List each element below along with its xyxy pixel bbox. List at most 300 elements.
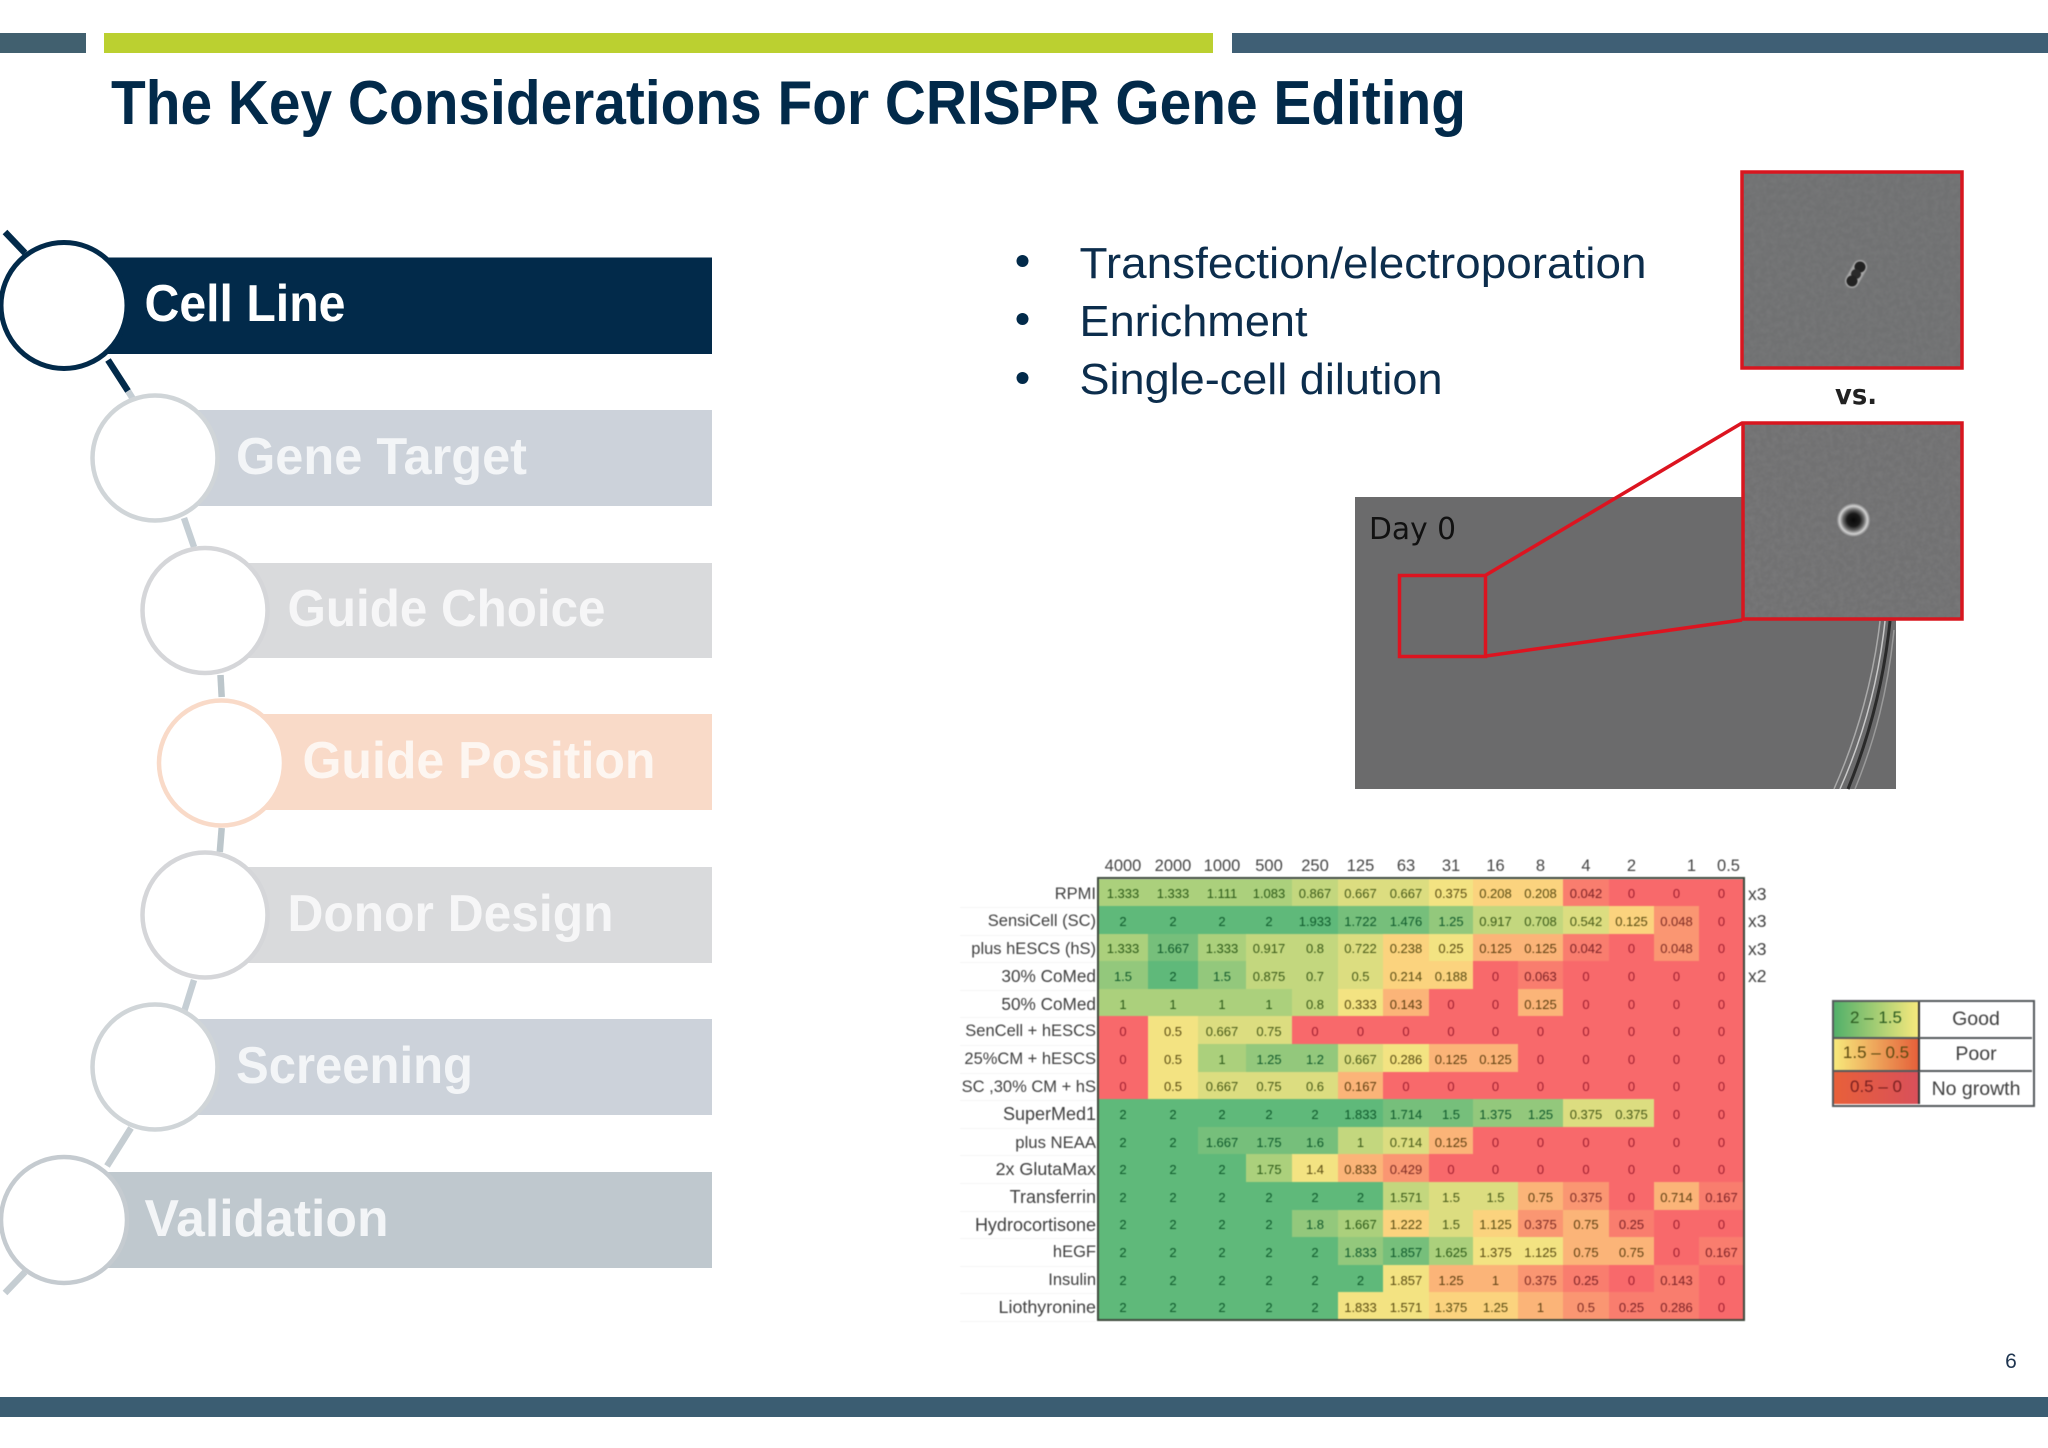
row: Liothyronine: 0 (1718, 1300, 1725, 1315)
row: Hydrocortisone: 2 (1265, 1217, 1273, 1232)
row: SensiCell: 2 (1218, 914, 1226, 929)
row: 25%CM + hESCS: 0.125 (1479, 1052, 1512, 1067)
row: Hydrocortisone: 2 (1119, 1217, 1127, 1232)
row: SuperMed1: 2 (1218, 1107, 1226, 1122)
row: Liothyronine: 1 (1537, 1300, 1544, 1315)
row: Liothyronine: 0.25 (1619, 1300, 1644, 1315)
row: 2x GlutaMax: 2 (1169, 1162, 1177, 1177)
row: SuperMed1: 1.5 (1442, 1107, 1460, 1122)
legend swatch: 2-1.5 (1834, 1002, 1918, 1037)
row: hEGF: 1.857 (1390, 1245, 1422, 1260)
replicate labels: x2 (1748, 966, 1766, 986)
row: 2x GlutaMax: 0 (1492, 1162, 1499, 1177)
row: 50% CoMed: 0.333 (1344, 997, 1377, 1012)
row: 25%CM + hESCS: 0 (1582, 1052, 1590, 1067)
row: 2x GlutaMax: 0 (1673, 1162, 1680, 1177)
row: SC ,30% CM + hS: 0 (1492, 1079, 1499, 1094)
row: RPMI: 0.867 (1299, 886, 1331, 901)
heatmap column headers: 8 (1536, 857, 1545, 875)
row: Hydrocortisone: 0 (1673, 1217, 1680, 1232)
heatmap row labels: 25%CM + hESCS (964, 1050, 1096, 1068)
row: RPMI: 0.667 (1344, 886, 1377, 901)
row: hEGF: 0.75 (1573, 1245, 1599, 1260)
step: Validation (1, 1157, 712, 1283)
row: hEGF: 2 (1119, 1245, 1127, 1260)
replicate labels: x3 (1748, 911, 1766, 931)
bullet list (1016, 239, 1646, 404)
row: plus NEAA: 2 (1119, 1135, 1127, 1150)
row: plus hESCS: 0.8 (1306, 941, 1324, 956)
row: Liothyronine: 1.375 (1435, 1300, 1467, 1315)
row: Insulin: 2 (1169, 1273, 1177, 1288)
row: SC ,30% CM + hS: 0 (1628, 1079, 1635, 1094)
step: Cell Line (1, 242, 712, 368)
row: 30% CoMed: 2 (1169, 969, 1177, 984)
row: 25%CM + hESCS: 1.2 (1306, 1052, 1324, 1067)
row: plus NEAA: 0 (1537, 1135, 1544, 1150)
title: The Key Considerations For CRISPR Gene Editing (111, 69, 1466, 138)
row: SenCell + hESCS: 0 (1119, 1024, 1127, 1039)
replicate labels (1748, 884, 1766, 986)
row: 50% CoMed: 1 (1218, 997, 1226, 1012)
row: 2x GlutaMax: 1.4 (1306, 1162, 1324, 1177)
panel: workflow steps (0, 230, 712, 1296)
row: Transferrin: 1.5 (1486, 1190, 1505, 1205)
row: SC ,30% CM + hS: 0.667 (1206, 1079, 1238, 1094)
row: 2x GlutaMax: 0 (1628, 1162, 1635, 1177)
row: plus hESCS: 0.125 (1524, 941, 1557, 956)
row: plus hESCS: 0.722 (1344, 941, 1377, 956)
row: plus NEAA: 0 (1628, 1135, 1635, 1150)
row: Liothyronine (1098, 1291, 1744, 1320)
row: 30% CoMed: 1.5 (1213, 969, 1231, 984)
row: hEGF: 2 (1311, 1245, 1319, 1260)
row: Liothyronine: 1.25 (1483, 1300, 1508, 1315)
step: Guide Choice: Guide Choice (288, 580, 606, 638)
row: 25%CM + hESCS: 1 (1218, 1052, 1226, 1067)
row: 25%CM + hESCS (1098, 1043, 1744, 1073)
row: 50% CoMed (1098, 988, 1744, 1017)
row: 50% CoMed: 0.125 (1524, 997, 1557, 1012)
inset: single cell (1743, 423, 1962, 619)
row: 50% CoMed: 0 (1582, 997, 1590, 1012)
row: 30% CoMed: 0 (1718, 969, 1725, 984)
row: 50% CoMed: 0 (1718, 997, 1725, 1012)
row: plus NEAA: 0.125 (1435, 1135, 1467, 1150)
small zoom box (1400, 576, 1486, 656)
heatmap column headers: 2 (1627, 857, 1636, 875)
row: 2x GlutaMax (1098, 1153, 1744, 1183)
row: Insulin: 2 (1218, 1273, 1226, 1288)
row: 25%CM + hESCS: 0 (1537, 1052, 1544, 1067)
row: 50% CoMed: 0 (1447, 997, 1455, 1012)
row: 30% CoMed: 0 (1492, 969, 1499, 984)
row: Transferrin: 2 (1357, 1190, 1364, 1205)
step: Cell Line: Cell Line (144, 275, 346, 333)
row: plus hESCS: 0 (1718, 941, 1725, 956)
heatmap row labels: RPMI (1055, 884, 1096, 902)
step: Gene Target: Gene Target (236, 428, 527, 486)
row: Hydrocortisone (1098, 1209, 1744, 1238)
row: Insulin: 0 (1718, 1273, 1725, 1288)
row: hEGF (1098, 1236, 1744, 1266)
row: SuperMed1: 0.375 (1570, 1107, 1602, 1122)
row: plus NEAA: 0 (1718, 1135, 1725, 1150)
heatmap row labels: 2x GlutaMax (996, 1159, 1096, 1179)
heatmap column headers: 125 (1347, 857, 1374, 875)
row: plus NEAA: 0.714 (1390, 1135, 1422, 1150)
row: Hydrocortisone: 0.375 (1524, 1217, 1557, 1232)
row: SenCell + hESCS: 0 (1628, 1024, 1635, 1039)
row: SenCell + hESCS: 0 (1357, 1024, 1364, 1039)
heatmap row labels: 30% CoMed (1001, 966, 1096, 986)
row: SenCell + hESCS: 0 (1311, 1024, 1319, 1039)
row: SensiCell: 1.722 (1344, 914, 1377, 929)
row: plus NEAA: 2 (1169, 1135, 1177, 1150)
legend swatch: 0.5-0: 0.5 – 0 (1850, 1076, 1902, 1096)
heatmap row labels: SuperMed1 (1003, 1104, 1096, 1124)
row: SC ,30% CM + hS: 0 (1582, 1079, 1590, 1094)
row: Insulin: 1.25 (1438, 1273, 1464, 1288)
row: 50% CoMed: 0.8 (1306, 997, 1324, 1012)
row: Transferrin: 0.75 (1528, 1190, 1553, 1205)
row: RPMI: 0 (1673, 886, 1680, 901)
row: SuperMed1: 1.375 (1479, 1107, 1512, 1122)
row: hEGF: 2 (1218, 1245, 1226, 1260)
step: Guide Position: Guide Position (302, 732, 656, 790)
legend swatch: 1.5-0.5: 1.5 – 0.5 (1843, 1043, 1909, 1062)
top bar: lime segment (104, 33, 1213, 53)
legend swatch: 0.5-0 (1834, 1072, 1918, 1104)
row: 2x GlutaMax: 0.833 (1344, 1162, 1377, 1177)
bullet: Single-cell dilution: Single-cell dilution (1080, 355, 1442, 404)
row: Insulin: 0 (1628, 1273, 1635, 1288)
row: 25%CM + hESCS: 0 (1119, 1052, 1127, 1067)
row: 2x GlutaMax: 0 (1447, 1162, 1455, 1177)
row: Liothyronine: 2 (1119, 1300, 1127, 1315)
legend label: No growth: No growth (1932, 1078, 2020, 1100)
row: Transferrin: 0.375 (1570, 1190, 1602, 1205)
row: 2x GlutaMax: 0 (1537, 1162, 1544, 1177)
row: 2x GlutaMax: 1.75 (1256, 1162, 1282, 1177)
row: 30% CoMed: 0.5 (1351, 969, 1370, 984)
row: SuperMed1: 0.375 (1615, 1107, 1648, 1122)
row: Transferrin: 0.167 (1705, 1190, 1738, 1205)
row: 50% CoMed: 0 (1673, 997, 1680, 1012)
row: SuperMed1: 0 (1673, 1107, 1680, 1122)
row: Hydrocortisone: 2 (1218, 1217, 1226, 1232)
heatmap row labels: hEGF (1053, 1243, 1096, 1261)
row: Insulin: 0.25 (1573, 1273, 1599, 1288)
row: SuperMed1: 1.25 (1528, 1107, 1553, 1122)
bullet: Enrichment: Enrichment (1080, 297, 1308, 346)
row: plus NEAA: 0 (1582, 1135, 1590, 1150)
row: 25%CM + hESCS: 0.667 (1344, 1052, 1377, 1067)
heatmap row labels: SenCell + hESCS (965, 1022, 1096, 1040)
row: Transferrin: 2 (1218, 1190, 1226, 1205)
row: RPMI: 1.333 (1157, 886, 1189, 901)
row: hEGF: 1.375 (1479, 1245, 1512, 1260)
row: RPMI: 1.083 (1253, 886, 1285, 901)
legend label: Poor: Poor (1955, 1043, 1997, 1065)
row: Transferrin: 1.571 (1390, 1190, 1422, 1205)
step: Donor Design (142, 852, 712, 978)
row: plus hESCS: 1.667 (1157, 941, 1189, 956)
row: hEGF: 1.625 (1435, 1245, 1467, 1260)
row: 2x GlutaMax: 2 (1119, 1162, 1127, 1177)
row: SuperMed1: 0 (1718, 1107, 1725, 1122)
page number: 6 (2005, 1350, 2017, 1373)
row: SenCell + hESCS (1098, 1015, 1744, 1045)
replicate labels: x3 (1748, 939, 1766, 959)
row: plus hESCS: 0 (1628, 941, 1635, 956)
row: Liothyronine: 2 (1311, 1300, 1319, 1315)
row: plus NEAA: 1.667 (1206, 1135, 1238, 1150)
row: SC ,30% CM + hS (1098, 1071, 1744, 1100)
step: Validation: Validation (144, 1190, 388, 1248)
heatmap column headers: 500 (1255, 857, 1283, 875)
microscopy figure (1355, 170, 1964, 790)
heatmap border (1097, 877, 1745, 1321)
row: SensiCell: 2 (1119, 914, 1127, 929)
heatmap column headers: 31 (1442, 857, 1460, 875)
step: Guide Choice (142, 548, 712, 673)
row: 50% CoMed: 0 (1628, 997, 1635, 1012)
row: plus NEAA: 1.75 (1256, 1135, 1282, 1150)
legend swatch: 1.5-0.5 (1834, 1037, 1918, 1072)
row: SenCell + hESCS: 0 (1718, 1024, 1725, 1039)
row: 25%CM + hESCS: 0 (1718, 1052, 1725, 1067)
heatmap column headers: 1000 (1204, 857, 1240, 875)
row: 30% CoMed: 0.214 (1390, 969, 1422, 984)
row: 2x GlutaMax: 0 (1718, 1162, 1725, 1177)
row: SenCell + hESCS: 0 (1673, 1024, 1680, 1039)
heatmap column headers: 63 (1397, 857, 1415, 875)
row: Liothyronine: 2 (1265, 1300, 1273, 1315)
row: Insulin: 1.857 (1390, 1273, 1422, 1288)
heatmap row labels: SensiCell (SC) (988, 912, 1096, 930)
row: plus hESCS: 0.25 (1438, 941, 1464, 956)
step: Donor Design: Donor Design (288, 885, 614, 943)
heatmap row labels: plus NEAA (1015, 1133, 1096, 1152)
heatmap column headers: 250 (1301, 857, 1329, 875)
heatmap row labels: Hydrocortisone (975, 1215, 1096, 1235)
row: SC ,30% CM + hS: 0 (1402, 1079, 1410, 1094)
row: SenCell + hESCS: 0 (1582, 1024, 1590, 1039)
row: 30% CoMed: 1.5 (1114, 969, 1132, 984)
row: plus hESCS: 1.333 (1107, 941, 1139, 956)
legend label: Good: Good (1952, 1008, 2000, 1030)
row: Liothyronine: 2 (1218, 1300, 1226, 1315)
row: Insulin: 2 (1119, 1273, 1127, 1288)
heatmap column headers: 16 (1486, 857, 1505, 875)
row: 30% CoMed: 0.7 (1306, 969, 1324, 984)
microscopy: Day 0 well image (1355, 497, 1896, 789)
row: Hydrocortisone: 0.25 (1619, 1217, 1644, 1232)
heatmap row labels: plus hESCS (hS) (971, 940, 1096, 958)
row: hEGF: 0.167 (1705, 1245, 1738, 1260)
heatmap column headers: 0.5 (1717, 857, 1740, 875)
row: plus NEAA: 0 (1673, 1135, 1680, 1150)
row: SensiCell: 0.708 (1524, 914, 1557, 929)
row: SenCell + hESCS: 0.5 (1164, 1024, 1182, 1039)
step: Screening (92, 1004, 712, 1130)
heatmap column headers (1104, 857, 1740, 875)
heatmap row labels: Liothyronine (999, 1297, 1096, 1317)
zoom callout lines (1486, 423, 1742, 656)
top header bars (0, 33, 2048, 53)
row: Liothyronine: 0.5 (1577, 1300, 1595, 1315)
row: plus hESCS: 0.042 (1570, 941, 1602, 956)
row: 30% CoMed: 0.063 (1524, 969, 1557, 984)
row: 25%CM + hESCS: 0.125 (1435, 1052, 1467, 1067)
row: SensiCell: 0.542 (1570, 914, 1602, 929)
top bar: right segment (1232, 33, 2048, 53)
row: 30% CoMed: 0.875 (1253, 969, 1285, 984)
row: SC ,30% CM + hS: 0 (1537, 1079, 1544, 1094)
heatmap row labels (962, 884, 1096, 1318)
row: 50% CoMed: 0.143 (1390, 997, 1422, 1012)
row: RPMI: 0.042 (1570, 886, 1602, 901)
row: Insulin: 0.375 (1524, 1273, 1557, 1288)
row: RPMI: 0.667 (1390, 886, 1422, 901)
row: 50% CoMed: 0 (1492, 997, 1499, 1012)
row: SensiCell: 1.25 (1438, 914, 1464, 929)
row: Liothyronine: 1.833 (1344, 1300, 1377, 1315)
row: SuperMed1: 2 (1265, 1107, 1273, 1122)
row: Liothyronine: 0.286 (1660, 1300, 1693, 1315)
heatmap column headers: 4 (1581, 857, 1591, 875)
legend swatch: 2-1.5: 2 – 1.5 (1850, 1008, 1902, 1027)
microscopy: Day 0 well image: Day 0 (1369, 512, 1456, 547)
row: Insulin: 1 (1492, 1273, 1499, 1288)
row: 50% CoMed: 1 (1169, 997, 1177, 1012)
heatmap row labels: SC ,30% CM + hS (962, 1078, 1096, 1096)
row: hEGF: 0.75 (1619, 1245, 1644, 1260)
heatmap grid (1098, 878, 1744, 1320)
row: Insulin: 2 (1311, 1273, 1319, 1288)
row: Hydrocortisone: 0 (1718, 1217, 1725, 1232)
row: 2x GlutaMax: 2 (1218, 1162, 1226, 1177)
row: Insulin: 2 (1265, 1273, 1273, 1288)
footer bar (0, 1397, 2048, 1417)
heatmap row labels: 50% CoMed (1001, 994, 1096, 1014)
row: RPMI (1098, 878, 1744, 907)
row: plus hESCS: 0.917 (1253, 941, 1285, 956)
row: plus NEAA: 1 (1357, 1135, 1364, 1150)
row: plus hESCS: 0.238 (1390, 941, 1422, 956)
heatmap column headers: 4000 (1105, 857, 1141, 875)
row: 30% CoMed: 0 (1628, 969, 1635, 984)
row: SenCell + hESCS: 0 (1402, 1024, 1410, 1039)
row: SensiCell: 0 (1718, 914, 1725, 929)
row: 2x GlutaMax: 0 (1582, 1162, 1590, 1177)
row: Transferrin: 0.714 (1660, 1190, 1693, 1205)
row: 30% CoMed: 0 (1582, 969, 1590, 984)
row: SenCell + hESCS: 0.75 (1256, 1024, 1282, 1039)
row: SC ,30% CM + hS: 0 (1447, 1079, 1455, 1094)
row: plus NEAA (1098, 1126, 1744, 1155)
row: SC ,30% CM + hS: 0.5 (1164, 1079, 1182, 1094)
row: Liothyronine: 2 (1169, 1300, 1177, 1315)
row: plus NEAA: 0 (1492, 1135, 1499, 1150)
row: SenCell + hESCS: 0.667 (1206, 1024, 1238, 1039)
row: Transferrin: 0 (1628, 1190, 1635, 1205)
row: 30% CoMed (1098, 960, 1744, 990)
step: Guide Position (159, 700, 712, 826)
heatmap column headers: 1 (1687, 857, 1696, 875)
row: Hydrocortisone: 1.125 (1479, 1217, 1512, 1232)
row: SuperMed1: 1.714 (1390, 1107, 1422, 1122)
row: RPMI: 1.333 (1107, 886, 1139, 901)
row: SensiCell: 0.917 (1479, 914, 1512, 929)
row: hEGF: 2 (1265, 1245, 1273, 1260)
row: SensiCell: 1.476 (1390, 914, 1422, 929)
row: SenCell + hESCS: 0 (1537, 1024, 1544, 1039)
row: Hydrocortisone: 1.5 (1442, 1217, 1460, 1232)
row: hEGF: 1.125 (1524, 1245, 1557, 1260)
row: plus NEAA: 1.6 (1306, 1135, 1324, 1150)
row: Transferrin: 2 (1265, 1190, 1273, 1205)
row: plus hESCS: 0.048 (1660, 941, 1693, 956)
heatmap row labels: Transferrin (1010, 1187, 1096, 1207)
row: 30% CoMed: 0 (1673, 969, 1680, 984)
row: 25%CM + hESCS: 0.286 (1390, 1052, 1422, 1067)
row: Transferrin: 2 (1119, 1190, 1127, 1205)
replicate labels: x3 (1748, 884, 1766, 904)
step: Screening: Screening (236, 1037, 473, 1095)
row: 30% CoMed: 0.188 (1435, 969, 1467, 984)
row: SuperMed1: 1.833 (1344, 1107, 1377, 1122)
row: Insulin: 0.143 (1660, 1273, 1693, 1288)
row: Transferrin: 2 (1311, 1190, 1319, 1205)
row: SuperMed1: 2 (1119, 1107, 1127, 1122)
legend label: Poor (1918, 1037, 2032, 1072)
row: Transferrin (1098, 1181, 1744, 1211)
row: plus hESCS (1098, 933, 1744, 962)
top bar: left segment (0, 33, 86, 53)
inset: two cells (1742, 172, 1962, 368)
legend label: Good (1918, 1002, 2032, 1037)
row: RPMI: 0 (1628, 886, 1635, 901)
vs. label: vs. (1835, 378, 1877, 411)
row: Transferrin: 1.5 (1442, 1190, 1460, 1205)
row: SC ,30% CM + hS: 0.167 (1344, 1079, 1377, 1094)
row: hEGF: 0 (1673, 1245, 1680, 1260)
row: SenCell + hESCS: 0 (1492, 1024, 1499, 1039)
row: SuperMed1: 2 (1169, 1107, 1177, 1122)
row: SC ,30% CM + hS: 0 (1673, 1079, 1680, 1094)
row: SC ,30% CM + hS: 0 (1119, 1079, 1127, 1094)
row: 25%CM + hESCS: 0.5 (1164, 1052, 1182, 1067)
row: hEGF: 2 (1169, 1245, 1177, 1260)
row: SensiCell (1098, 905, 1744, 935)
row: 25%CM + hESCS: 0 (1673, 1052, 1680, 1067)
row: SensiCell: 0.125 (1615, 914, 1648, 929)
row: SuperMed1: 2 (1311, 1107, 1319, 1122)
row: Hydrocortisone: 0.75 (1573, 1217, 1599, 1232)
row: SensiCell: 1.933 (1299, 914, 1331, 929)
row: Hydrocortisone: 2 (1169, 1217, 1177, 1232)
row: Liothyronine: 1.571 (1390, 1300, 1422, 1315)
row: RPMI: 0.208 (1524, 886, 1557, 901)
row: Hydrocortisone: 1.667 (1344, 1217, 1377, 1232)
row: Hydrocortisone: 1.222 (1390, 1217, 1422, 1232)
row: 25%CM + hESCS: 0 (1628, 1052, 1635, 1067)
row: SensiCell: 2 (1265, 914, 1273, 929)
row: Transferrin: 2 (1169, 1190, 1177, 1205)
row: SC ,30% CM + hS: 0.6 (1306, 1079, 1324, 1094)
